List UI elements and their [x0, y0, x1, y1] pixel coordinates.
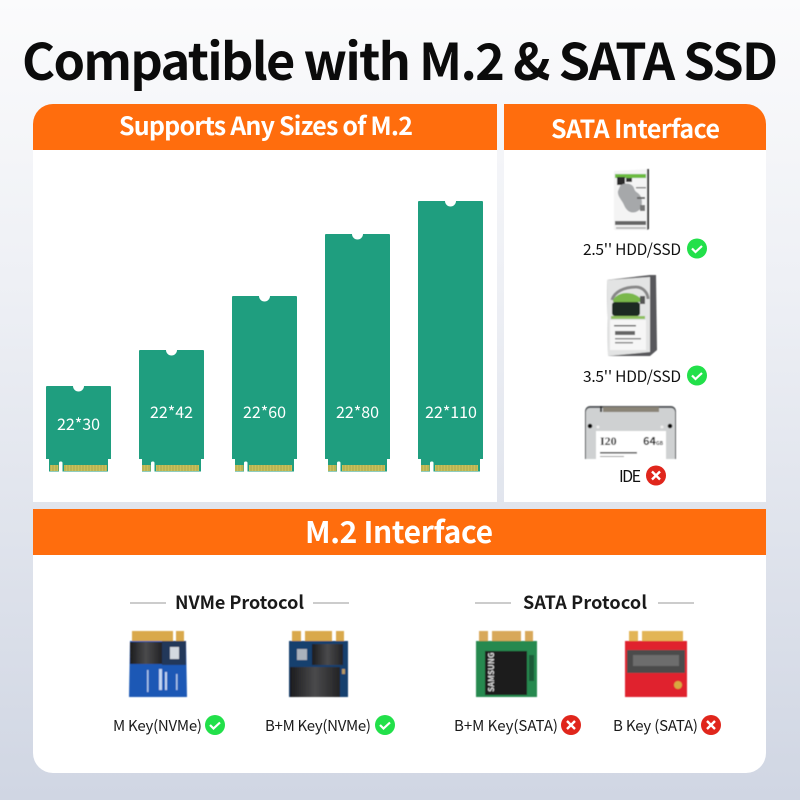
heading: NVMe protocol: NVMe Protocol: [175, 589, 304, 615]
card: 22*80: [325, 234, 390, 472]
label: M key: M Key(NVMe): [113, 715, 202, 736]
icon: cross: [646, 466, 666, 486]
label: B+M key SATA: B+M Key(SATA): [454, 715, 558, 736]
card: 22*110: 22*110: [425, 399, 477, 423]
panel heading: SATA interface: [504, 104, 766, 150]
label: IDE: [619, 463, 666, 487]
icon: Samsung SSD: [476, 631, 537, 697]
icon: B+M key SSD: [289, 631, 348, 697]
panel heading: SATA interface: SATA Interface: [551, 110, 720, 146]
icon: IDE drive: 64GB: [643, 433, 664, 449]
icon: red adapter: [625, 631, 687, 697]
card: 22*60: 22*60: [243, 399, 286, 423]
panel heading: supports any sizes: Supports Any Sizes of M.2: [119, 107, 413, 143]
icon: Samsung SSD: SAMSUNG: [486, 652, 497, 692]
icon: 3.5 inch drive: [607, 275, 657, 356]
card: 22*60: [232, 296, 297, 472]
panel heading: M.2 interface: [33, 508, 766, 555]
label: 3.5 inch drive: 3.5'' HDD/SSD: [583, 365, 681, 387]
card: 22*30: 22*30: [57, 411, 100, 435]
label: B key SATA: B Key (SATA): [613, 715, 698, 736]
card: 22*30: [46, 386, 111, 472]
label: B+M key NVMe: B+M Key(NVMe): [265, 715, 371, 736]
card: 22*42: [139, 350, 204, 472]
icon: 2.5 inch drive: [614, 169, 649, 230]
card: 22*80: 22*80: [336, 399, 379, 423]
icon: check: [205, 715, 225, 735]
card: 22*42: 22*42: [150, 399, 193, 423]
icon: cross: [701, 715, 721, 735]
icon: check: [687, 238, 707, 258]
panel heading: M.2 interface: M.2 Interface: [305, 508, 493, 552]
heading: SATA protocol: SATA Protocol: [523, 589, 647, 615]
panel: M.2 sizes: [33, 104, 497, 502]
icon: check: [375, 715, 395, 735]
label: 2.5 inch drive: 2.5'' HDD/SSD: [583, 238, 681, 260]
icon: IDE drive: [585, 406, 676, 459]
panel: SATA interface: [504, 104, 766, 502]
title: Compatible with M.2 & SATA SSD: [22, 21, 778, 95]
icon: cross: [561, 715, 581, 735]
icon: M key SSD: [129, 631, 187, 697]
panel heading: supports any sizes: [33, 104, 497, 150]
card: 22*110: [418, 201, 483, 472]
label: IDE: IDE: [619, 463, 641, 487]
icon: IDE drive: I20: [600, 434, 617, 448]
icon: check: [687, 366, 707, 386]
panel: M.2 interface: [33, 508, 766, 773]
